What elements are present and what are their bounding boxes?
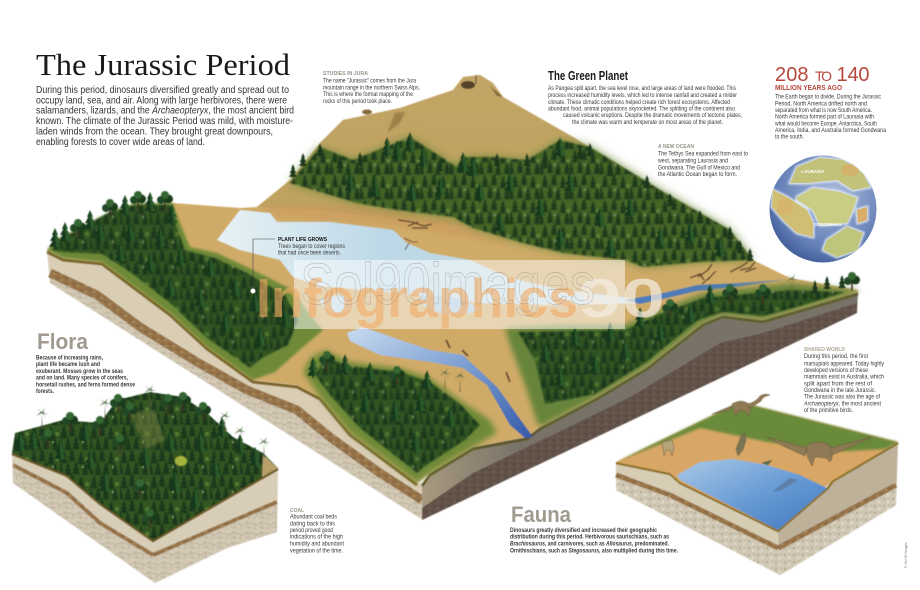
intro text: enabling forests to cover wide areas of land. xyxy=(36,137,205,148)
flora strata xyxy=(12,453,278,583)
fauna text: distribution during this period. Herbivorous saurischians, such as xyxy=(510,535,670,541)
coal text xyxy=(290,508,344,555)
shared world: SHARED WORLD xyxy=(804,347,845,353)
coal text: dating back to this xyxy=(290,521,335,527)
date range: to the south. xyxy=(775,135,804,141)
the green planet: the climate was warm and temperate on most areas of the planet. xyxy=(572,120,723,126)
date range: Period, North America drifted north and xyxy=(775,101,867,107)
mountain forest xyxy=(289,132,754,267)
the green planet: caused volcanic eruptions. Despite the dramatic movements of tectonic plates, xyxy=(563,113,742,119)
flora text: Flora xyxy=(37,329,89,354)
flora text: plant life became lush and xyxy=(36,362,100,368)
studies in jura: rocks of this period took place. xyxy=(323,99,392,105)
fauna strata xyxy=(616,442,898,575)
shared world: During this period, the first xyxy=(804,354,868,360)
watermark xyxy=(256,252,665,329)
fauna text xyxy=(510,502,678,554)
fauna dinosaurs xyxy=(662,394,872,492)
flora block xyxy=(12,385,278,583)
shared world: developed versions of these xyxy=(804,368,869,374)
globe: GONDWANA xyxy=(814,222,842,227)
a new ocean: Gondwana. The Gulf of Mexico and xyxy=(658,166,740,172)
a new ocean xyxy=(657,144,749,178)
flora forest xyxy=(12,385,278,540)
shared world: split apart from the rest of xyxy=(804,381,872,387)
intro text: During this period, dinosaurs diversified greatly and spread out to xyxy=(36,85,289,96)
the green planet: abundant food, animal populations skyrocketed. The splitting of the continent also xyxy=(548,106,736,112)
flora text: Because of increasing rains, xyxy=(36,356,103,362)
date range: America, India, and Australia formed Gondwana xyxy=(775,128,887,134)
plant life callout: Trees began to cover regions xyxy=(278,244,345,250)
right forest xyxy=(505,272,860,427)
date range: The Earth began to divide. During the Jurassic xyxy=(775,95,881,101)
watermark: Sol90images xyxy=(300,252,595,317)
intro text: occupy land, sea, and air. Along with large herbivores, there were xyxy=(36,95,287,106)
the green planet: As Pangea split apart, the sea level rose, and large areas of land were flooded. This xyxy=(548,86,736,92)
plant life callout xyxy=(250,237,345,294)
left forest xyxy=(47,191,323,380)
coal text: Abundant coal beds xyxy=(290,515,337,521)
flora text xyxy=(36,329,136,395)
shared world: Gondwana in the late Jurassic. xyxy=(804,388,876,394)
plant life callout: that had once been deserts. xyxy=(278,250,341,256)
coal text: indications of the high xyxy=(290,535,343,541)
fauna text: Fauna xyxy=(511,502,572,527)
river, right xyxy=(625,279,790,304)
intro text: salamanders, lizards, and the Archaeopteryx, the most ancient bird xyxy=(36,106,294,117)
date range: MILLION YEARS AGO xyxy=(775,85,843,92)
left strata face xyxy=(47,250,423,520)
studies in jura: STUDIES IN JURA xyxy=(323,71,368,77)
a new ocean: the Atlantic Ocean began to form. xyxy=(658,172,737,178)
a new ocean: A NEW OCEAN xyxy=(658,144,694,150)
studies in jura xyxy=(323,71,420,105)
coal text: humidity and abundant xyxy=(290,541,344,547)
date range: 140 xyxy=(836,64,870,86)
intro text: known. The climate of the Jurassic Period was mild, with moisture- xyxy=(36,116,293,127)
title: The Jurassic Period xyxy=(36,47,291,82)
date range xyxy=(774,64,887,141)
studies in jura: The name "Jurassic" comes from the Jura xyxy=(323,78,417,84)
shared world: of the primitive birds. xyxy=(804,408,853,414)
globe xyxy=(770,156,876,262)
date range: 208 xyxy=(775,64,808,86)
a new ocean: The Tethys Sea expanded from east to xyxy=(658,152,749,158)
flora text: forests. xyxy=(36,389,54,395)
fauna water xyxy=(677,459,827,530)
shared world: mammals exist in Australia, which xyxy=(804,375,884,381)
watermark: Infographics xyxy=(256,267,578,329)
the green planet: The Green Planet xyxy=(548,69,629,83)
fauna text: Brachiosaurus, and carnivores, such as Allosaurus, predominated. xyxy=(510,541,669,547)
date range: what would become Europe. Antarctica, South xyxy=(774,121,877,127)
shared world: Archaeopteryx, the most ancient xyxy=(803,401,881,407)
fauna block xyxy=(616,394,898,575)
river, lower xyxy=(347,327,533,438)
the green planet xyxy=(548,69,742,126)
studies in jura: This is where the formal mapping of the xyxy=(323,92,414,98)
fauna text: Ornithischians, such as Stegosaurus, also multiplied during this time. xyxy=(510,548,678,554)
intro text: laden winds from the ocean. They brought great downpours, xyxy=(36,126,273,137)
date range: TO xyxy=(815,68,832,84)
watermark: 90 xyxy=(578,267,665,329)
shared world: marsupials appeared. Today highly xyxy=(804,361,884,367)
globe: LAURASIA xyxy=(801,169,825,174)
shared world: The Jurassic was also the age of xyxy=(804,395,880,401)
terrain surface xyxy=(47,75,858,483)
intro text xyxy=(36,85,294,148)
the green planet: process increased humidity levels, which led to intense rainfall and created a milder xyxy=(548,93,737,99)
coal text: vegetation of the time. xyxy=(290,549,343,555)
date range: separated from what is now South America. xyxy=(775,108,872,114)
mountain with crater xyxy=(257,75,660,230)
coal text: COAL xyxy=(290,508,305,514)
plant life callout: PLANT LIFE GROWS xyxy=(278,237,327,243)
studies in jura: mountain range in the northern Swiss Alps. xyxy=(323,85,420,91)
lake xyxy=(217,210,640,314)
the green planet: climate. These climatic conditions helped create rich forest ecosystems. Affected xyxy=(548,100,730,106)
flora text: and on land. Many species of conifers, xyxy=(36,376,128,382)
coal text: period proved good xyxy=(290,528,333,534)
sand shore tint xyxy=(257,205,520,245)
front forest xyxy=(303,350,497,483)
copyright: © Sol 90 Images xyxy=(904,542,908,568)
shared world xyxy=(803,347,884,414)
fauna ground xyxy=(616,402,898,530)
a new ocean: west, separating Laurasia and xyxy=(657,158,728,164)
main terrain block xyxy=(47,75,860,520)
fauna text: Dinosaurs greatly diversified and increased their geographic xyxy=(510,528,658,534)
flora text: horsetail rushes, and ferns formed dense xyxy=(36,382,136,388)
small dinosaurs on main terrain xyxy=(398,220,756,382)
date range: North America formed part of Laurasia with xyxy=(775,115,874,121)
flora text: exuberant. Mosses grow in the seas xyxy=(36,369,124,375)
right strata face xyxy=(422,292,858,520)
